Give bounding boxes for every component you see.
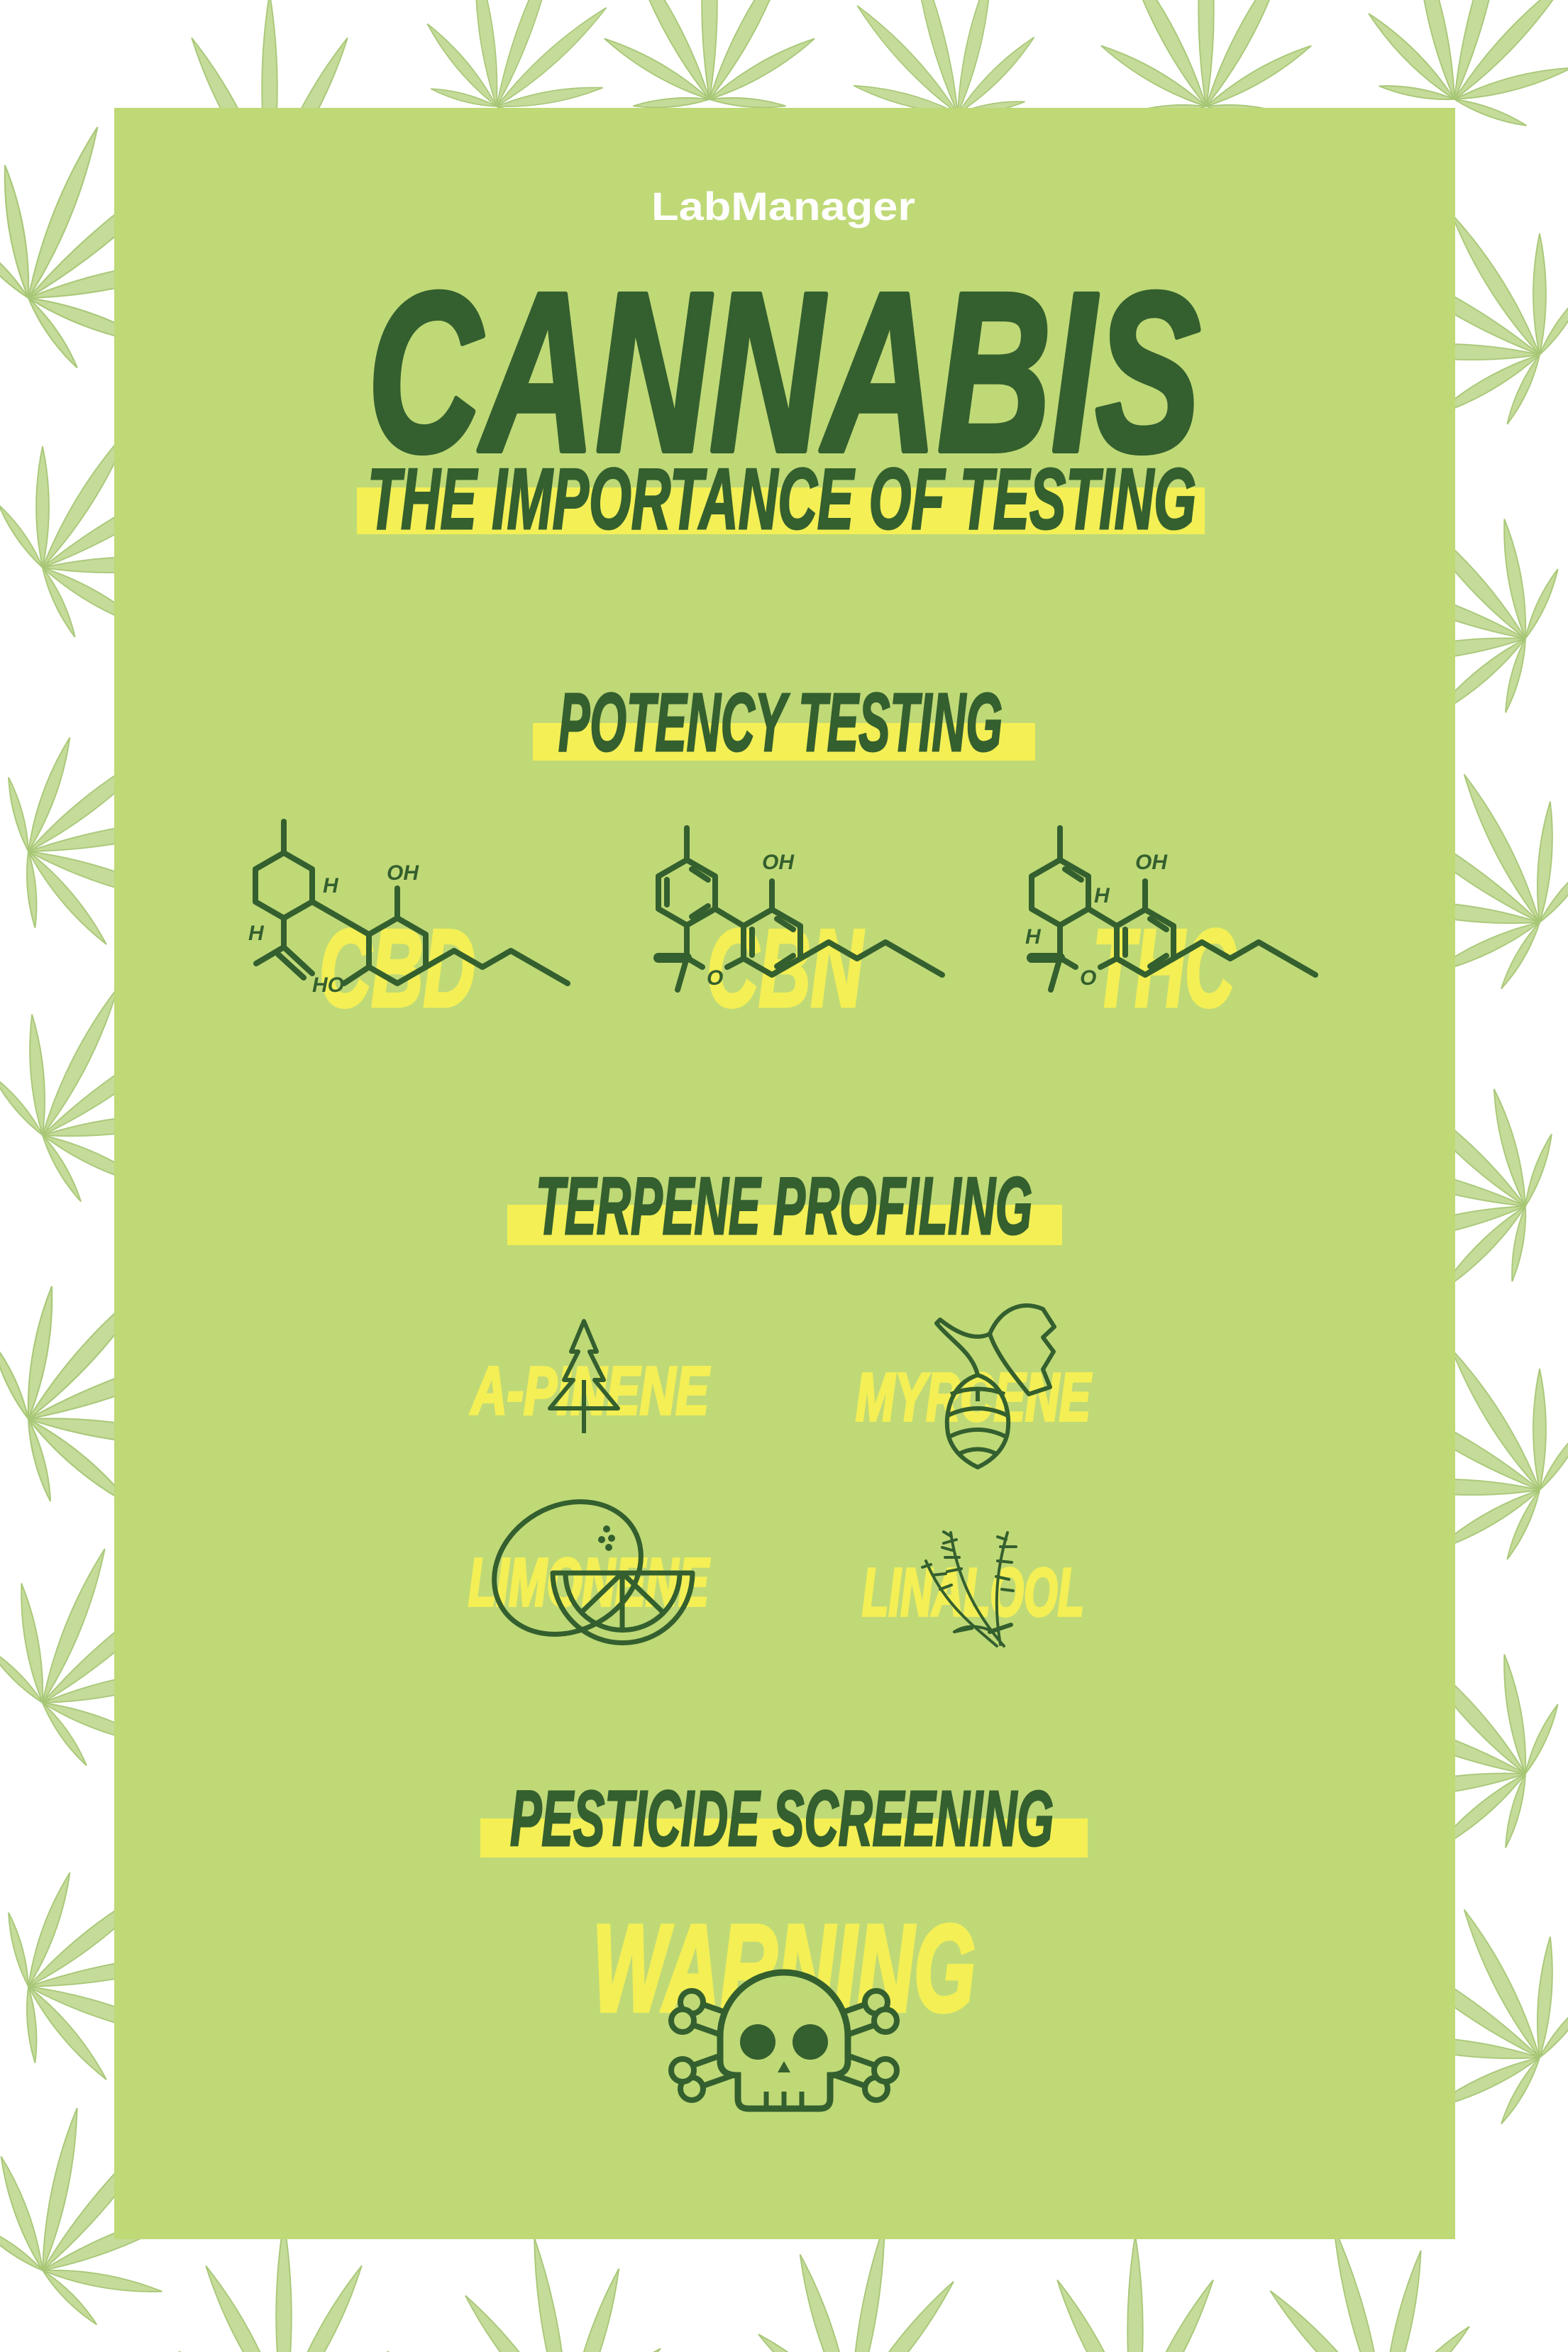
- molecule: CBD: H: [323, 874, 339, 898]
- logo: LabManager: LabManager: [651, 184, 915, 228]
- molecule: THC: H: [1094, 884, 1110, 907]
- molecule: CBN: [658, 828, 942, 990]
- molecule: CBN: O: [707, 966, 723, 990]
- molecule: CBD: [248, 822, 568, 997]
- yellow molecule labels: CBN: [707, 907, 864, 1029]
- icon: hop: [937, 1305, 1054, 1467]
- heading: pesticide screening: [480, 1775, 1088, 1862]
- terpene labels: A-PINENE: [470, 1353, 710, 1429]
- molecule: THC: O: [1080, 966, 1096, 990]
- molecule: CBD: H: [248, 922, 265, 945]
- heading: potency testing: [533, 676, 1035, 768]
- terpene labels: LIMONENE: [468, 1545, 710, 1621]
- subtitle with highlight: [357, 451, 1205, 547]
- heading: pesticide screening: PESTICIDE SCREENING: [510, 1775, 1054, 1862]
- yellow molecule labels: CBD: [319, 907, 475, 1029]
- icon: skull and crossbones: [671, 1972, 897, 2109]
- icon: lemon: [470, 1476, 692, 1660]
- yellow molecule labels: [319, 907, 1235, 1029]
- panel: [114, 108, 1455, 2239]
- icon: lavender herb: [922, 1532, 1016, 1646]
- title: CANNABIS: CANNABIS: [368, 245, 1201, 499]
- molecule: CBD: HO: [312, 973, 344, 997]
- heading: terpene profiling: TERPENE PROFILING: [536, 1161, 1032, 1252]
- heading: terpene profiling: [507, 1161, 1062, 1252]
- heading: potency testing: POTENCY TESTING: [558, 676, 1003, 768]
- molecule: CBN: OH: [762, 851, 795, 874]
- molecule: THC: OH: [1135, 851, 1168, 874]
- terpene labels: LINALOOL: [862, 1555, 1084, 1630]
- terpene labels: MYRCENE: [856, 1359, 1092, 1435]
- icon: pine tree: [550, 1321, 618, 1433]
- warning label: WARNING: [592, 1899, 976, 2037]
- yellow molecule labels: THC: [1093, 907, 1235, 1029]
- molecule: CBD: OH: [387, 861, 419, 885]
- molecule: THC: [1025, 828, 1315, 990]
- terpene labels: [468, 1353, 1092, 1630]
- molecule: THC: H: [1025, 925, 1042, 949]
